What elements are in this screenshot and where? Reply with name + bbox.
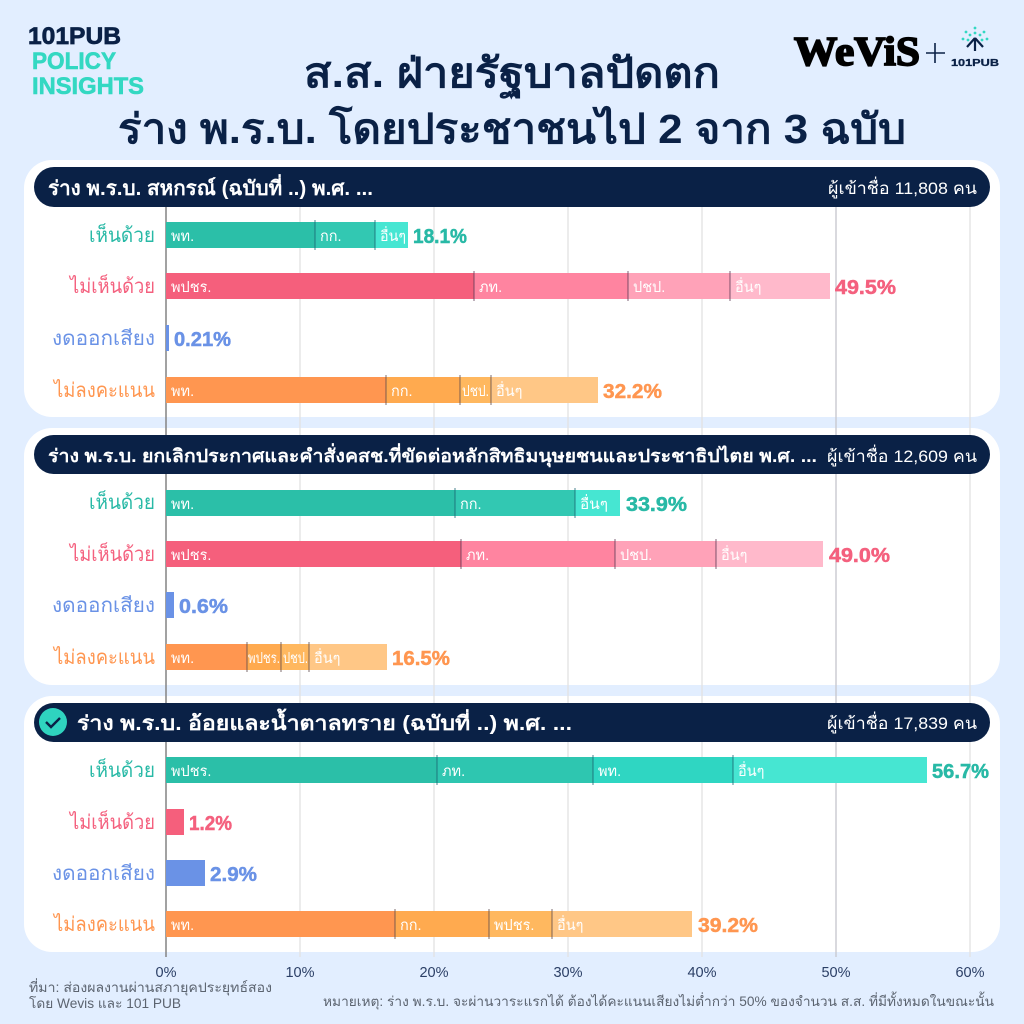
axis labels: 20%	[419, 965, 449, 981]
row: agree 18.1%: เห็นด้วย	[89, 222, 155, 247]
row: abstain 0.21%	[52, 325, 231, 351]
row: not voting 16.5%: อื่นๆ	[314, 648, 340, 667]
row: agree 56.7%: พปชร.	[171, 764, 211, 780]
row: not voting 39.2%: อื่นๆ	[557, 915, 583, 934]
row: disagree 1.2%	[68, 809, 232, 835]
row: abstain 0.6%	[52, 592, 228, 618]
row: agree 18.1%: 18.1%	[413, 226, 467, 248]
chart: cooperatives bill votes	[52, 220, 896, 405]
row: disagree 1.2%: 1.2%	[189, 813, 232, 835]
axis: zero line	[165, 207, 167, 957]
panel: cane and sugar bill background	[24, 696, 1000, 952]
row: abstain 0.21%: งดออกเสียง	[52, 328, 155, 350]
row: not voting 39.2%: พท.	[171, 918, 194, 934]
row: abstain 2.9%: งดออกเสียง	[52, 863, 155, 885]
row: disagree 49.5%: อื่นๆ	[735, 277, 761, 296]
row: abstain 0.21%: 0.21%	[174, 329, 231, 351]
row: disagree 49.0%: ปชป.	[620, 548, 652, 564]
axis labels: 40%	[687, 965, 717, 981]
title	[118, 50, 906, 152]
row: agree 56.7%: 56.7%	[932, 761, 989, 783]
row: abstain 0.6%: 0.6%	[179, 596, 228, 618]
row: abstain 0.6%: งดออกเสียง	[52, 595, 155, 617]
row: agree 56.7%: ภท.	[442, 764, 465, 780]
row: agree 33.9%: เห็นด้วย	[89, 489, 155, 514]
row: agree 56.7%: อื่นๆ	[738, 761, 764, 780]
row: agree 18.1%: อื่นๆ	[380, 226, 406, 245]
row: not voting 16.5%: 16.5%	[392, 648, 450, 670]
row: disagree 49.5%: ไม่เห็นด้วย	[68, 273, 155, 298]
footnote: หมายเหตุ: ร่าง พ.ร.บ. จะผ่านวาระแรกได้ ต้องได้คะแนนเสียงไม่ต่ำกว่า 50% ของจำนวน ส.ส. ที่มีทั้งหมดในขณะนั้น	[323, 991, 994, 1010]
header: cooperatives bill: ผู้เข้าชื่อ 11,808 คน	[828, 176, 977, 199]
row: abstain 2.9%	[52, 860, 257, 886]
logo: 101PUB Policy Insights: 101PUB	[28, 23, 121, 50]
icon: passed check mark	[39, 708, 67, 736]
row: disagree 49.0%	[68, 539, 890, 569]
logo: 101PUB Policy Insights: POLICY	[32, 48, 116, 75]
row: disagree 49.0%: อื่นๆ	[721, 545, 747, 564]
row: not voting 32.2%: อื่นๆ	[496, 381, 522, 400]
logo: WeVis + 101PUB: 101PUB	[951, 57, 999, 69]
header: cane and sugar bill	[34, 703, 990, 742]
row: not voting 32.2%: กก.	[391, 384, 413, 400]
row: agree 33.9%: 33.9%	[626, 494, 687, 516]
row: agree 18.1%: พท.	[171, 229, 194, 245]
axis labels: 10%	[285, 965, 315, 981]
row: not voting 16.5%: ปชป.	[283, 651, 308, 667]
row: agree 33.9%: กก.	[460, 497, 482, 513]
header: repeal NCPO orders bill: ร่าง พ.ร.บ. ยกเลิกประกาศและคำสั่งคสช.ที่ขัดต่อหลักสิทธิมนุษยชนและประชาธิปไตย พ.ศ. ...	[48, 443, 817, 468]
header: cooperatives bill	[34, 167, 990, 207]
row: not voting 32.2%: 32.2%	[603, 381, 662, 403]
logo: WeVis + 101PUB: WeViS	[794, 28, 920, 74]
row: agree 18.1%: กก.	[320, 229, 342, 245]
axis labels: 50%	[821, 965, 851, 981]
row: disagree 49.5%: ปชป.	[633, 280, 665, 296]
chart: repeal NCPO orders bill votes	[52, 488, 890, 672]
panel: cooperatives bill background	[24, 160, 1000, 417]
row: agree 56.7%	[89, 755, 989, 785]
row: not voting 16.5%: พท.	[171, 651, 194, 667]
row: disagree 49.0%: พปชร.	[171, 548, 211, 564]
row: agree 33.9%	[89, 488, 687, 518]
axis labels	[156, 965, 985, 981]
row: disagree 49.5%	[68, 271, 896, 301]
row: agree 56.7%: เห็นด้วย	[89, 757, 155, 782]
row: disagree 49.0%: 49.0%	[829, 545, 890, 567]
row: not voting 32.2%: ปชป.	[462, 384, 489, 400]
row: disagree 49.5%: 49.5%	[835, 277, 896, 299]
header: cane and sugar bill: ร่าง พ.ร.บ. อ้อยและน้ำตาลทราย (ฉบับที่ ..) พ.ศ. ...	[77, 708, 572, 735]
source note	[29, 978, 272, 1011]
row: disagree 49.0%: ภท.	[466, 548, 489, 564]
axis labels: 30%	[553, 965, 583, 981]
row: not voting 39.2%	[52, 909, 758, 939]
title: ส.ส. ฝ่ายรัฐบาลปัดตก	[304, 50, 720, 100]
row: not voting 32.2%: ไม่ลงคะแนน	[52, 379, 155, 402]
row: agree 18.1%	[89, 220, 467, 250]
panel: repeal NCPO orders bill background	[24, 428, 1000, 685]
row: not voting 39.2%: ไม่ลงคะแนน	[52, 913, 155, 936]
logo: WeVis + 101PUB	[794, 27, 999, 74]
logo: 101PUB Policy Insights	[28, 23, 144, 100]
row: disagree 49.5%: พปชร.	[171, 280, 211, 296]
row: not voting 16.5%	[52, 642, 450, 672]
row: not voting 32.2%	[52, 375, 662, 405]
axis labels: 0%	[156, 965, 177, 981]
header: repeal NCPO orders bill: ผู้เข้าชื่อ 12,609 คน	[827, 444, 977, 467]
row: agree 33.9%: พท.	[171, 497, 194, 513]
row: not voting 39.2%: พปชร.	[494, 918, 534, 934]
row: agree 33.9%: อื่นๆ	[580, 494, 608, 513]
source note: โดย Wevis และ 101 PUB	[29, 995, 181, 1011]
title: ร่าง พ.ร.บ. โดยประชาชนไป 2 จาก 3 ฉบับ	[118, 105, 906, 152]
logo: 101PUB Policy Insights: INSIGHTS	[32, 73, 144, 100]
row: not voting 39.2%: กก.	[400, 918, 422, 934]
chart: cane and sugar bill votes	[52, 755, 989, 939]
row: abstain 2.9%: 2.9%	[210, 864, 257, 886]
header: repeal NCPO orders bill	[34, 435, 990, 474]
row: agree 56.7%: พท.	[598, 764, 621, 780]
row: not voting 39.2%: 39.2%	[698, 915, 758, 937]
row: disagree 49.0%: ไม่เห็นด้วย	[68, 541, 155, 566]
row: not voting 16.5%: พปชร.	[248, 651, 280, 667]
header: cooperatives bill: ร่าง พ.ร.บ. สหกรณ์ (ฉบับที่ ..) พ.ศ. ...	[48, 173, 373, 200]
row: disagree 49.5%: ภท.	[479, 280, 502, 296]
row: not voting 16.5%: ไม่ลงคะแนน	[52, 646, 155, 669]
header: cane and sugar bill: ผู้เข้าชื่อ 17,839 คน	[827, 711, 977, 734]
row: disagree 1.2%: ไม่เห็นด้วย	[68, 809, 155, 834]
axis labels: 60%	[955, 965, 985, 981]
source note: ที่มา: ส่องผลงานผ่านสภายุคประยุทธ์สอง	[29, 978, 272, 996]
row: not voting 32.2%: พท.	[171, 384, 194, 400]
